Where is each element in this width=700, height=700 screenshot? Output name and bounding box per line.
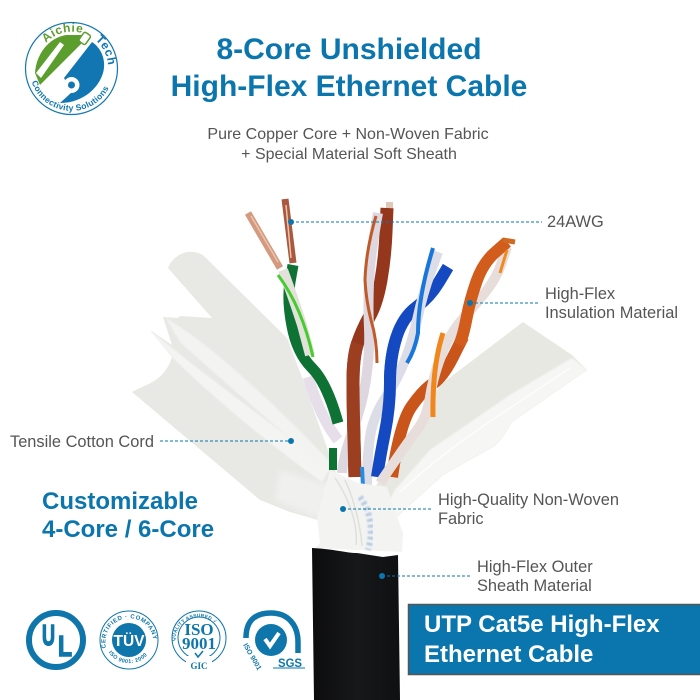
orange pair — [380, 240, 515, 483]
certification badge: ISO 9001 GIC — [172, 610, 226, 671]
title: High-Flex Ethernet Cable — [171, 70, 527, 103]
callout: High-Flex Insulation Material: High-Flex — [545, 285, 616, 303]
callout: High-Flex Outer Sheath Material: High-Flex Outer — [477, 558, 593, 576]
certification badge: SGS — [241, 613, 305, 672]
certification badge: TUV — [100, 610, 158, 670]
callout: High-Flex Outer Sheath Material: Sheath Material — [477, 577, 592, 595]
black outer sheath — [312, 548, 400, 700]
title — [171, 33, 527, 103]
left fabric flap — [132, 252, 345, 520]
certification badge: TUV: TÜV — [114, 633, 145, 650]
title: 8-Core Unshielded — [216, 33, 482, 66]
callout: High-Flex Insulation Material: Insulation Material — [545, 304, 678, 322]
certification badge: ISO 9001 GIC: GIC — [190, 661, 208, 671]
callout: Tensile Cotton Cord: Tensile Cotton Cord — [10, 433, 154, 451]
callout: High-Flex Outer Sheath Material — [379, 558, 593, 595]
logo: Aichie Tech: Connectivity Solutions — [32, 80, 108, 113]
certification badge: ISO 9001 GIC: QUALITY ASSURED ✓ — [172, 614, 217, 641]
customizable note: 4-Core / 6-Core — [42, 516, 214, 543]
banner: UTP Cat5e High-Flex — [424, 611, 660, 638]
customizable note — [42, 488, 214, 543]
cable photo illustration — [132, 199, 587, 700]
logo: Aichie Tech — [24, 22, 118, 116]
callout: 24AWG: 24AWG — [547, 213, 604, 231]
green pair — [248, 199, 338, 470]
callout: High-Flex Insulation Material — [467, 285, 678, 322]
certification badge: TUV: CERTIFIED · COMPANY — [101, 614, 158, 648]
customizable note: Customizable — [42, 488, 198, 515]
callout: High-Quality Non-Woven Fabric — [340, 491, 619, 528]
logo: Aichie Tech: Aichie — [43, 23, 82, 42]
callout: High-Quality Non-Woven Fabric: Fabric — [438, 510, 484, 528]
certification badge: TUV: ISO 9001: 2000 — [108, 650, 146, 664]
banner: Ethernet Cable — [424, 641, 593, 668]
certification badge: UL — [29, 613, 83, 667]
callout: 24AWG — [288, 213, 604, 231]
logo: Aichie Tech: Tech — [97, 34, 116, 64]
brown pair — [342, 205, 393, 477]
certification badge: UL: L — [58, 631, 72, 663]
certification badge: SGS: ISO 9001 — [241, 642, 262, 672]
certification badge: SGS: SGS — [278, 656, 302, 670]
subtitle: Pure Copper Core + Non-Woven Fabric — [207, 126, 489, 143]
subtitle — [207, 126, 489, 163]
certification badge: ISO 9001 GIC: 9001 — [182, 634, 216, 653]
certification badge: ISO 9001 GIC: ISO — [184, 620, 214, 639]
blue pair — [362, 248, 448, 487]
certification badge: UL: U — [42, 620, 55, 652]
fabric binding — [315, 470, 403, 552]
banner — [408, 604, 700, 674]
right fabric flap — [370, 322, 587, 548]
callout: High-Quality Non-Woven Fabric: High-Quality Non-Woven — [438, 491, 619, 509]
callout: Tensile Cotton Cord — [10, 433, 294, 451]
subtitle: + Special Material Soft Sheath — [241, 146, 457, 163]
